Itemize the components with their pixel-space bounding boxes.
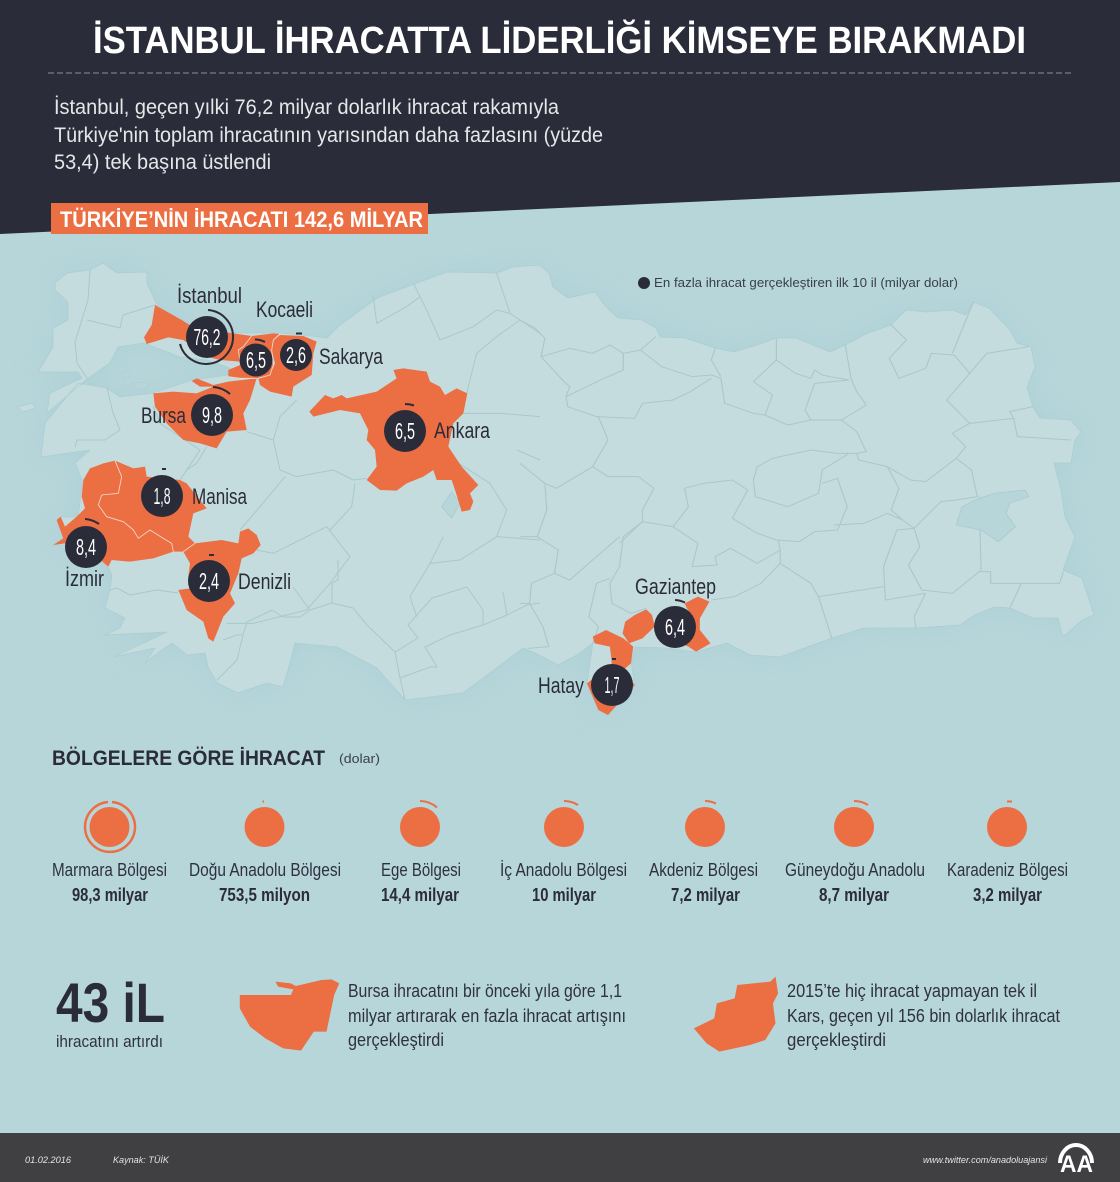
footer: www.twitter.com/anadoluajansi (923, 1155, 1048, 1165)
text: Kars note (787, 980, 1060, 1050)
marker: İzmir (65, 519, 107, 591)
marker: Kocaeli: 6,5 (246, 347, 266, 373)
region: Ege: Ege Bölgesi (381, 860, 461, 880)
region: Karadeniz: 3,2 milyar (973, 885, 1042, 905)
marker: Manisa: Manisa (192, 484, 248, 509)
marker: İzmir: İzmir (65, 566, 104, 591)
region: Güneydoğu Anadolu: Güneydoğu Anadolu (785, 860, 925, 880)
text: Bursa note: milyar artırarak en fazla ihracat artışını (348, 1005, 626, 1026)
footer: 01.02.2016 (25, 1155, 71, 1165)
region: Doğu Anadolu: Doğu Anadolu Bölgesi (189, 860, 341, 880)
map of Turkey (17, 263, 1094, 715)
region: Güneydoğu Anadolu (785, 801, 925, 905)
region: Marmara (52, 802, 167, 905)
marker: İstanbul: 76,2 (194, 324, 220, 350)
region: Karadeniz: Karadeniz Bölgesi (947, 860, 1068, 880)
marker: Ankara: 6,5 (395, 418, 415, 444)
stat: 43 il (56, 971, 165, 1051)
province: İstanbul (144, 305, 252, 362)
stat: 43 il: 43 iL (56, 971, 165, 1034)
footer (0, 1133, 1120, 1182)
region: Akdeniz: Akdeniz Bölgesi (649, 860, 758, 880)
province: Gaziantep (623, 597, 711, 652)
marker: Hatay: 1,7 (604, 672, 620, 698)
marker: Manisa (141, 469, 248, 517)
marker: Kocaeli: Kocaeli (256, 297, 313, 322)
marker: Denizli: 2,4 (199, 568, 219, 594)
marker: Gaziantep (635, 574, 716, 648)
province borders north-west and south-west (75, 270, 540, 700)
marker: İstanbul (177, 283, 242, 364)
marker: Manisa: 1,8 (154, 483, 170, 509)
region: Doğu Anadolu (189, 802, 341, 905)
region: Akdeniz (649, 801, 758, 905)
text: Kars note: Kars, geçen yıl 156 bin dolarlık ihracat (787, 1005, 1060, 1026)
province: Kocaeli (228, 333, 280, 378)
icon: AA logo: AA (1060, 1151, 1093, 1178)
province: Bursa (153, 378, 257, 448)
intro text: İstanbul, geçen yılki 76,2 milyar dolarlık ihracat rakamıyla (54, 96, 559, 119)
province: Hatay (587, 630, 635, 715)
marker: Bursa: 9,8 (202, 402, 222, 428)
region: İç Anadolu (500, 801, 627, 905)
region: Marmara: 98,3 milyar (72, 885, 148, 905)
province internal borders (98, 334, 280, 552)
region: Doğu Anadolu: 753,5 milyon (219, 885, 310, 905)
marker: Bursa: Bursa (141, 403, 187, 428)
badge: total exports: TÜRKİYE’NİN İHRACATI 142,6 MİLYAR (60, 207, 423, 232)
region: Marmara: Marmara Bölgesi (52, 860, 167, 880)
region: Akdeniz: 7,2 milyar (671, 885, 740, 905)
text: Bursa note (348, 980, 626, 1050)
province: Sakarya (258, 335, 317, 397)
marker: İzmir: 8,4 (76, 534, 96, 560)
text: Bursa note: gerçekleştirdi (348, 1029, 444, 1050)
highlighted provinces (53, 305, 711, 715)
marker: Kocaeli (240, 297, 313, 376)
footer: Kaynak: TÜİK (113, 1155, 170, 1165)
island: Gökçeada (17, 403, 35, 412)
region: Ege: 14,4 milyar (381, 885, 459, 905)
marker: Ankara (384, 404, 491, 452)
text: Kars note: gerçekleştirdi (787, 1029, 886, 1050)
marker: Hatay (538, 659, 633, 706)
marker: Hatay: Hatay (538, 673, 584, 698)
marker: İstanbul: İstanbul (177, 283, 242, 308)
top dark banner (0, 0, 1120, 234)
intro text: Türkiye'nin toplam ihracatının yarısından daha fazlasını (yüzde (54, 124, 603, 147)
marker: Ankara: Ankara (434, 418, 491, 443)
province: Denizli (178, 528, 261, 642)
section heading: (dolar) (339, 751, 380, 766)
region: Karadeniz (947, 802, 1068, 905)
marker: Gaziantep: Gaziantep (635, 574, 716, 599)
marker: Sakarya (280, 334, 384, 371)
province: Ankara (309, 368, 478, 512)
icon: Kars shape (694, 977, 778, 1052)
region: İç Anadolu: 10 milyar (532, 885, 596, 905)
text: Bursa note: Bursa ihracatını bir önceki yıla göre 1,1 (348, 980, 622, 1001)
intro text (54, 96, 603, 174)
province borders east (520, 302, 1071, 648)
province: Manisa (98, 461, 207, 552)
marker: Denizli: Denizli (238, 569, 291, 594)
marker: Sakarya: Sakarya (319, 344, 384, 369)
title: İSTANBUL İHRACATTA LİDERLİĞİ KİMSEYE BIRAKMADI (93, 18, 1026, 62)
icon: Bursa shape (240, 979, 339, 1051)
marker: Denizli (188, 555, 291, 602)
province borders west (153, 273, 540, 623)
marker: Sakarya: 2,6 (286, 342, 306, 368)
lakes (122, 372, 1029, 542)
section heading: BÖLGELERE GÖRE İHRACAT (52, 747, 325, 770)
legend: En fazla ihracat gerçekleştiren ilk 10 il (milyar dolar) (654, 275, 958, 290)
province: İzmir (53, 461, 173, 567)
region: Ege (381, 801, 461, 905)
marker: Bursa (141, 387, 233, 436)
region: Güneydoğu Anadolu: 8,7 milyar (819, 885, 889, 905)
marker: Gaziantep: 6,4 (665, 614, 685, 640)
stat: 43 il: ihracatını artırdı (56, 1032, 163, 1051)
text: Kars note: 2015’te hiç ihracat yapmayan tek il (787, 980, 1037, 1001)
intro text: 53,4) tek başına üstlendi (54, 151, 271, 174)
region: İç Anadolu: İç Anadolu Bölgesi (500, 860, 627, 880)
